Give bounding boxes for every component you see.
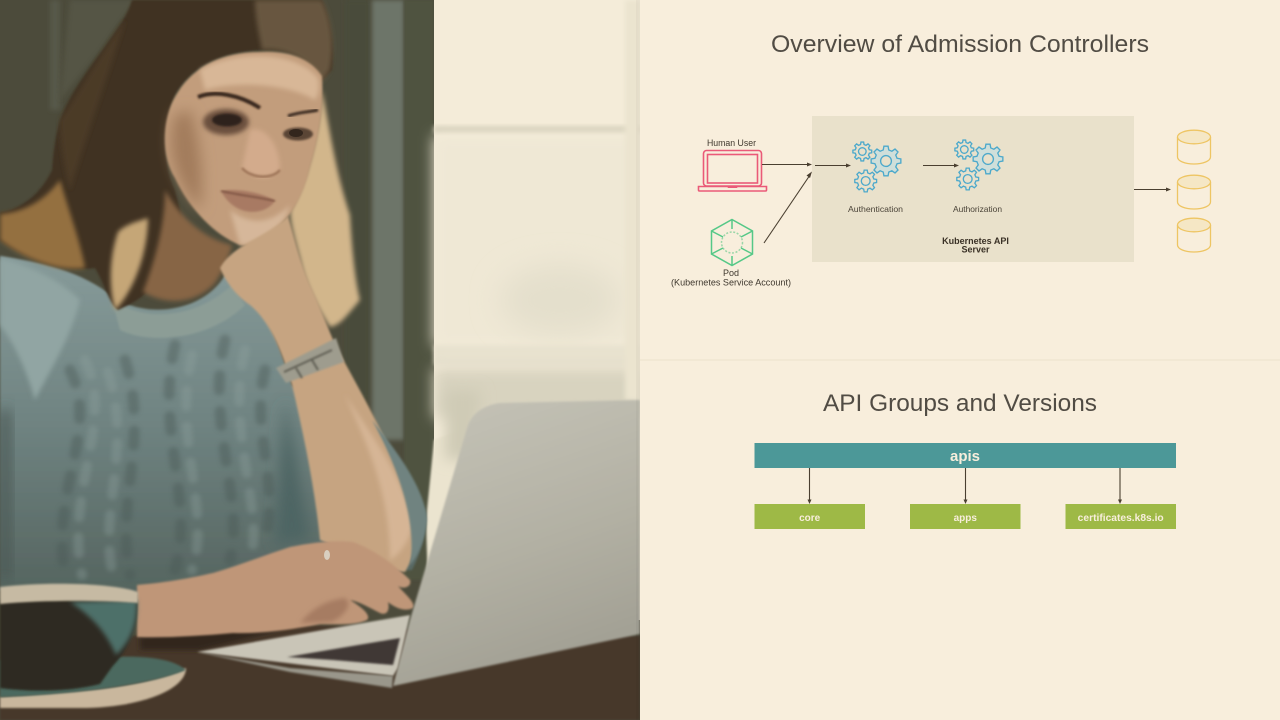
label: Pod: (Kubernetes Service Account) [671, 278, 791, 288]
label: Kubernetes API Server: Kubernetes API [942, 236, 1009, 246]
laptop base [197, 615, 410, 676]
icon: authentication gears [853, 142, 901, 192]
label: Authorization: Authorization [953, 204, 1002, 214]
hair right blonde [290, 90, 360, 327]
box: certificates.k8s.io [1066, 504, 1176, 529]
bar: apis: apis [950, 448, 980, 465]
title: API groups: API Groups and Versions [823, 390, 1097, 417]
arrow: user to API server [762, 162, 812, 166]
arrow: to authorization [923, 164, 959, 168]
eyes, brows, nose and lips [198, 94, 318, 212]
panel: slide backgrounds [640, 0, 1280, 720]
neck [143, 190, 232, 301]
icon: authorization gears [955, 140, 1003, 190]
sweater collar [116, 288, 244, 338]
box: core: core [799, 513, 821, 524]
coffee cup and saucer [0, 668, 186, 708]
box: apps: apps [954, 513, 977, 524]
title: admission controllers: Overview of Admission Controllers [771, 31, 1149, 58]
sleeve edge [372, 420, 427, 565]
arrow: to authentication [815, 164, 851, 168]
laptop lid [393, 400, 640, 686]
sweater [0, 256, 426, 595]
hair main [0, 0, 333, 310]
panel: Kubernetes API server box [812, 116, 1134, 262]
bar: apis [754, 443, 1176, 468]
icon: human user laptop [698, 150, 766, 191]
typing hand [137, 541, 414, 637]
arm and hand on neck [220, 216, 416, 572]
icon: database bottom [1178, 218, 1210, 252]
watch [276, 338, 344, 383]
icon: database middle [1178, 175, 1210, 209]
ring [324, 550, 330, 560]
icon: pod cube [712, 220, 752, 266]
label: Authentication: Authentication [848, 204, 903, 214]
arrow: API server to databases [1134, 188, 1171, 192]
arrow: apis to core [808, 468, 812, 504]
arrow: apis to apps [964, 468, 968, 504]
photo: woman working on a laptop [0, 0, 640, 720]
box: certificates.k8s.io: certificates.k8s.io [1078, 513, 1164, 524]
box: apps [910, 504, 1020, 529]
face [165, 52, 322, 245]
label: Kubernetes API Server: Server [961, 244, 990, 254]
icon: database top [1178, 130, 1210, 164]
arrow: apis to certificates [1118, 468, 1122, 504]
label: Pod: Pod [723, 268, 739, 278]
arrow: pod to API server [764, 172, 812, 243]
box: core [754, 504, 865, 529]
table [0, 625, 640, 720]
label: Human User: Human User [707, 138, 756, 148]
